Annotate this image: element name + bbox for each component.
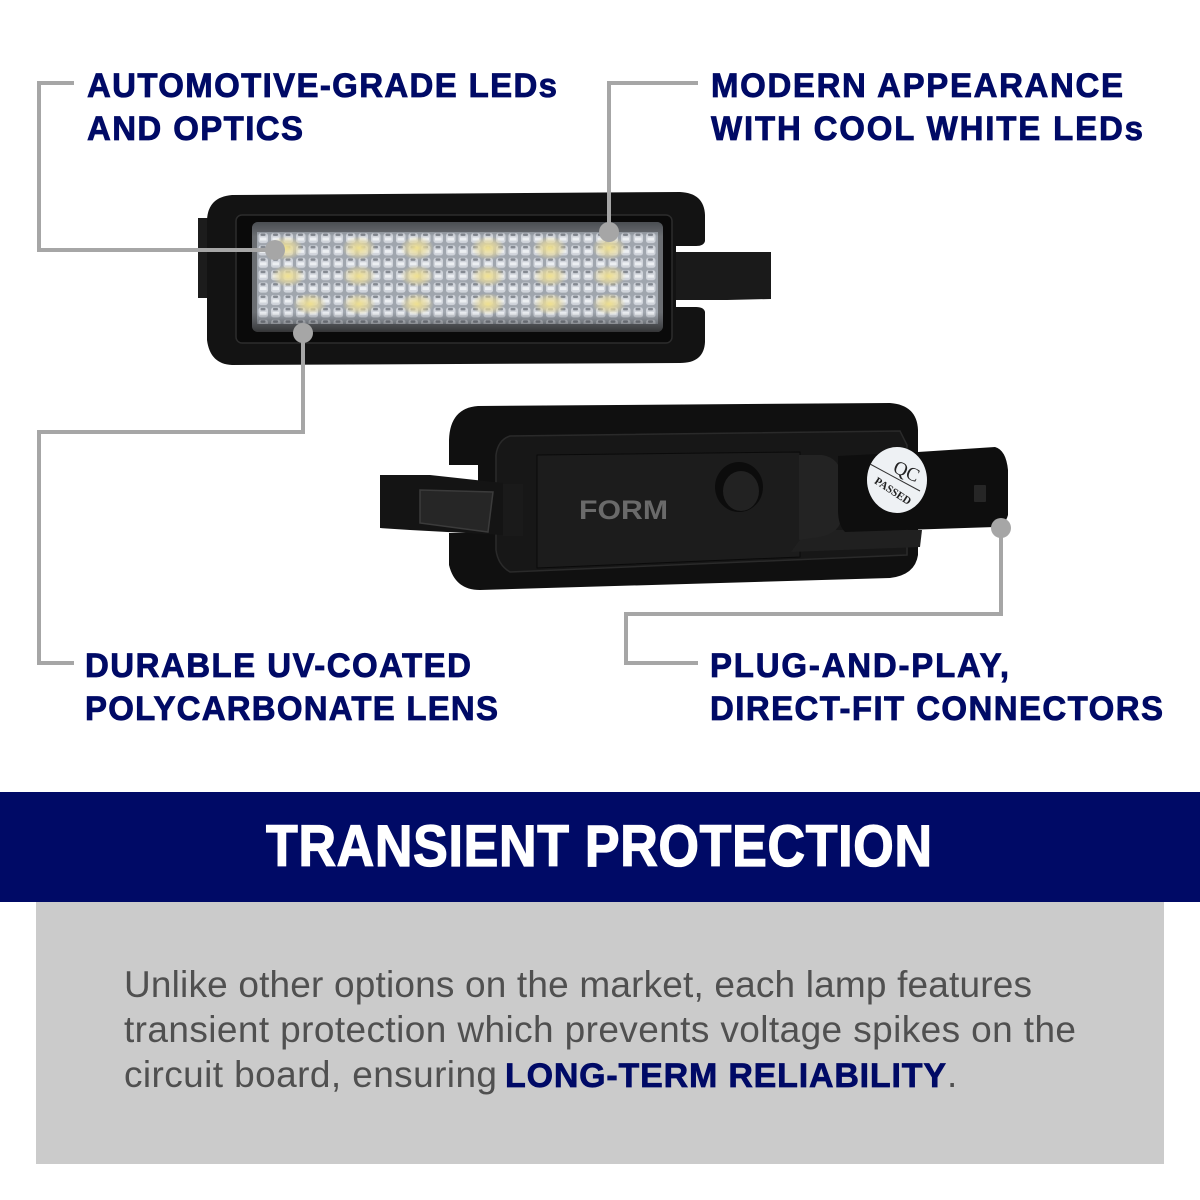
feature label: connectors: PLUG-AND-PLAY, bbox=[710, 646, 1009, 685]
panel: description bbox=[36, 902, 1164, 1164]
feature label: connectors bbox=[710, 646, 1163, 728]
QC sticker bbox=[867, 447, 927, 513]
feature label: modern appearance: WITH COOL WHITE LEDs bbox=[711, 109, 1143, 148]
feature label: automotive-grade LEDs and optics: AND OPTICS bbox=[87, 109, 303, 148]
lamp inner bezel bbox=[236, 215, 672, 343]
feature label: connectors: DIRECT-FIT CONNECTORS bbox=[710, 689, 1163, 728]
leader: automotive-grade LEDs bbox=[39, 83, 285, 260]
feature label: automotive-grade LEDs and optics: AUTOMOTIVE-GRADE LEDs bbox=[87, 66, 557, 105]
leader: polycarbonate lens bbox=[39, 323, 313, 663]
FORM logo: FORM bbox=[579, 495, 668, 525]
connector slot bbox=[974, 485, 986, 502]
button bbox=[715, 462, 763, 512]
feature label: durable lens bbox=[85, 646, 498, 728]
QC sticker: PASSED bbox=[872, 475, 913, 508]
product: rear lamp with connector bbox=[380, 403, 1008, 590]
feature label: durable lens: DURABLE UV-COATED bbox=[85, 646, 471, 685]
connector shroud bbox=[799, 455, 841, 540]
lens shading bbox=[252, 222, 663, 332]
rear clip bbox=[380, 475, 503, 535]
feature label: modern appearance bbox=[711, 66, 1143, 148]
rear flange bbox=[449, 403, 918, 590]
description text: . bbox=[947, 1054, 957, 1095]
lamp tab bbox=[676, 252, 771, 300]
lamp side clip bbox=[198, 218, 212, 298]
feature label: modern appearance: MODERN APPEARANCE bbox=[711, 66, 1123, 105]
banner: transient protection bbox=[0, 792, 1200, 902]
QC sticker: QC bbox=[890, 457, 923, 487]
lamp housing bbox=[207, 192, 705, 365]
description text: Unlike other options on the market, each lamp features bbox=[124, 964, 1032, 1005]
rear raised panel bbox=[496, 431, 907, 572]
leader: modern appearance bbox=[599, 83, 698, 242]
product: front lamp with LED lens bbox=[198, 192, 771, 365]
connector body bbox=[838, 447, 1008, 532]
lens bbox=[252, 222, 663, 332]
description text: transient protection which prevents voltage spikes on the bbox=[124, 1009, 1076, 1050]
banner: transient protection: TRANSIENT PROTECTION bbox=[266, 813, 932, 879]
feature label: automotive-grade LEDs and optics bbox=[87, 66, 557, 148]
leader: connectors bbox=[626, 518, 1011, 663]
description text bbox=[124, 964, 1076, 1095]
LED spots bbox=[269, 236, 626, 315]
description text: circuit board, ensuring bbox=[124, 1054, 497, 1095]
feature label: durable lens: POLYCARBONATE LENS bbox=[85, 689, 498, 728]
connector lower lip bbox=[791, 530, 922, 552]
description text: LONG-TERM RELIABILITY bbox=[505, 1057, 946, 1095]
lens grid bbox=[257, 232, 658, 324]
rear inner panel bbox=[537, 452, 800, 568]
